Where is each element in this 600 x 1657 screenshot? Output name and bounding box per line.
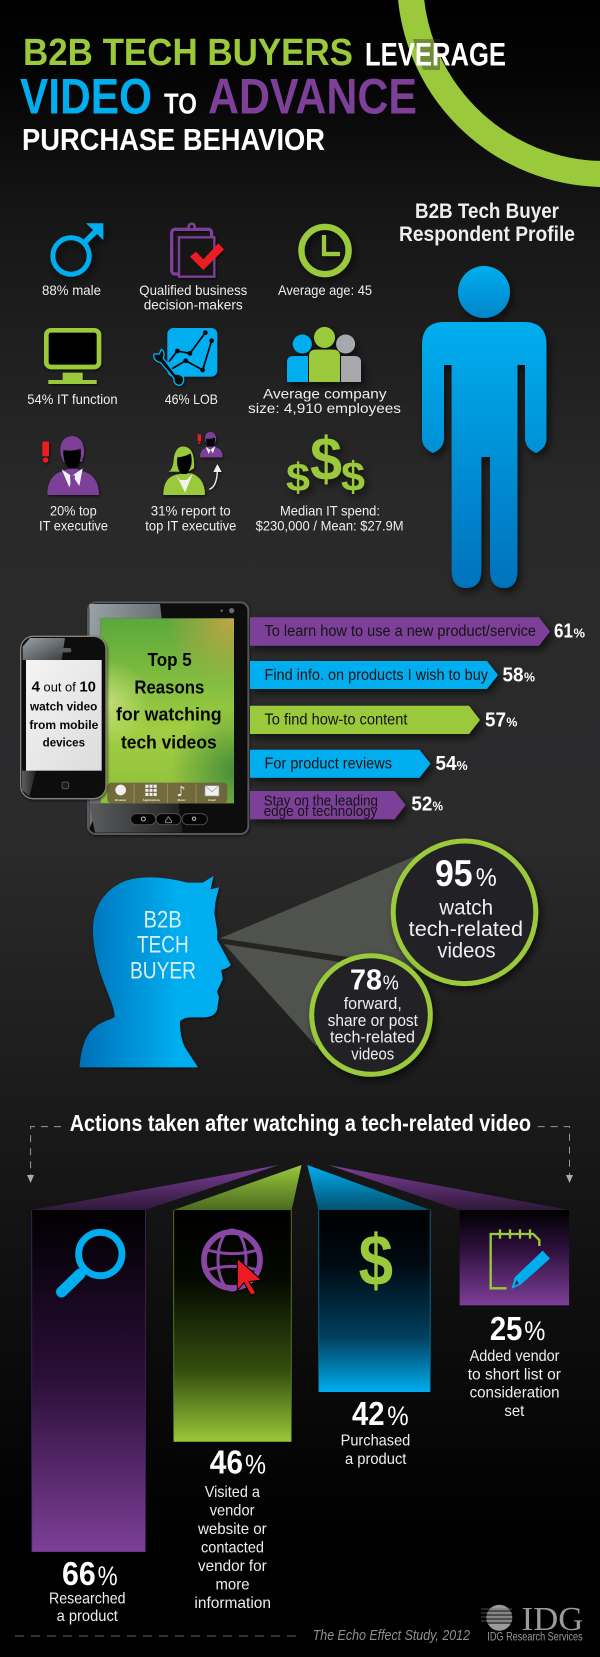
figure: buyer head silhouette: BUYER — [130, 957, 196, 984]
label: 31% report to top IT executive: 31% report to — [151, 503, 231, 519]
arrow bar: 52% leading edge: Stay on the leading — [264, 794, 378, 810]
dashed arrow left — [27, 1127, 61, 1183]
heading: actions taken: Actions taken after watching a tech-related video — [70, 1110, 531, 1136]
label: 20% top IT executive — [39, 503, 108, 534]
label: 31% report to top IT executive — [145, 503, 236, 534]
arrow bar: 58% find info: Find info. on products I wish to buy — [264, 667, 488, 684]
stat: 46% visited a vendor website: vendor — [210, 1503, 255, 1520]
arrow bar: 57% how-to content — [250, 706, 518, 734]
figure: buyer head silhouette: TECH — [137, 932, 189, 959]
label: average age: Average age: 45 — [278, 282, 372, 298]
bar: researched — [31, 1165, 279, 1552]
callout circle: 95% watch tech-related videos: tech-related — [409, 918, 523, 941]
icon: clipboard with check — [172, 222, 224, 277]
heading: respondent profile: B2B Tech Buyer — [415, 200, 559, 223]
tablet text: top 5 reasons: tech videos — [121, 731, 217, 752]
stat: 66% researched a product: % — [98, 1561, 118, 1591]
title: ADVANCE — [208, 68, 417, 124]
arrow bar: 57% how-to content: % — [506, 715, 518, 730]
stat: 66% researched a product: a product — [57, 1608, 118, 1625]
title: PURCHASE BEHAVIOR — [22, 122, 325, 157]
logo: IDG Research Services: IDG — [522, 1601, 583, 1638]
icon: dollar signs — [286, 425, 365, 500]
arrow bar: 52% leading edge: 52 — [411, 794, 432, 816]
callout circle: 95% watch tech-related videos: % — [476, 864, 497, 892]
label: 54% IT function: 54% IT function — [27, 391, 118, 407]
label: 88% male: 88% male — [42, 282, 101, 298]
stat: 46% visited a vendor website: 46 — [210, 1444, 243, 1481]
stat: 46% visited a vendor website: information — [194, 1595, 271, 1612]
dashed arrow right — [538, 1127, 573, 1183]
icon: woman reporting to executive — [163, 432, 223, 495]
label: average company size — [248, 386, 401, 416]
icon: monitor — [46, 330, 99, 384]
phone text: 4 out of 10 watch video from mobile devices: devices — [43, 736, 85, 750]
arrow bar: 57% how-to content: To find how-to content — [264, 711, 408, 728]
icon: clock — [301, 227, 349, 274]
stat: 25% added vendor to short list: set — [504, 1403, 525, 1420]
label: qualified business decision-makers: Qualified business — [139, 282, 247, 298]
icon: dollar signs: $ — [341, 453, 365, 500]
stat: 25% added vendor to short list — [468, 1310, 562, 1420]
stat: 66% researched a product: Researched — [49, 1591, 126, 1608]
device: tablet with top 5 reasons — [88, 602, 248, 834]
callout circle: 95% watch tech-related videos: 95 — [435, 853, 473, 894]
title: VIDEO — [20, 68, 152, 124]
device: tablet with top 5 reasons: Browser — [115, 798, 126, 802]
device: tablet with top 5 reasons: Music — [178, 798, 186, 802]
label: median IT spend: $230,000 / Mean: $27.9M — [256, 518, 404, 534]
phone text: 4 out of 10 watch video from mobile devices: 4 out of 10 — [32, 680, 96, 696]
icon: dollar sign: $ — [359, 1221, 393, 1301]
stat: 46% visited a vendor website: Visited a — [205, 1484, 260, 1501]
label: median IT spend — [256, 503, 404, 534]
label: average company size: size: 4,910 employees — [248, 400, 401, 416]
callout circle: 78% forward, share or post: share or post — [328, 1012, 418, 1030]
arrow bar: 54% product reviews: 54 — [436, 753, 457, 775]
icon: notepad and pencil — [491, 1229, 550, 1289]
stat: 42% purchased a product: % — [387, 1401, 409, 1431]
decorative green ring — [410, 0, 600, 174]
arrow bar: 58% find info: 58 — [502, 665, 524, 687]
tablet text: top 5 reasons: for watching — [116, 704, 222, 725]
label: 20% top IT executive: IT executive — [39, 518, 108, 534]
icon: dollar signs: $ — [310, 425, 342, 493]
label: average company size: Average company — [263, 386, 386, 402]
bars: actions taken — [31, 1165, 569, 1552]
label: median IT spend: Median IT spend: — [280, 503, 380, 519]
stat: 42% purchased a product: a product — [345, 1451, 407, 1468]
stat: 25% added vendor to short list: to short list or — [468, 1367, 562, 1384]
stat: 25% added vendor to short list: 25 — [490, 1310, 522, 1347]
callout circle: 78% forward, share or post: videos — [351, 1045, 394, 1063]
phone text: 4 out of 10 watch video from mobile devices: from mobile — [29, 718, 98, 732]
stat: 42% purchased a product — [341, 1395, 410, 1468]
label: qualified business decision-makers — [139, 282, 247, 312]
stat: 46% visited a vendor website: vendor for — [198, 1558, 267, 1575]
arrow bar: 52% leading edge: % — [432, 799, 443, 814]
bar: visited vendor website — [173, 1165, 302, 1442]
stat: 46% visited a vendor website — [194, 1444, 271, 1612]
phone text: 4 out of 10 watch video from mobile devices: watch video — [29, 700, 98, 714]
arrow bar: 52% leading edge — [250, 791, 443, 820]
arrow bar: 61% learn how to use: To learn how to use a new product/service — [264, 623, 536, 640]
title: B2B TECH BUYERS — [23, 32, 353, 74]
stat: 25% added vendor to short list: consideration — [470, 1385, 560, 1402]
figure: blue person silhouette — [422, 266, 546, 588]
device: tablet with top 5 reasons: ♪ — [177, 784, 186, 800]
callout circle: 78% forward, share or post — [312, 956, 430, 1074]
device: tablet with top 5 reasons: Applications — [143, 798, 161, 802]
arrow bar: 52% leading edge: edge of technology — [264, 804, 378, 820]
arrow bar: 61% learn how to use — [250, 617, 585, 646]
label: qualified business decision-makers: decision-makers — [144, 296, 243, 312]
device: tablet with top 5 reasons: Email — [208, 798, 216, 802]
callout circle: 78% forward, share or post: % — [383, 972, 399, 994]
stat: 42% purchased a product: 42 — [352, 1395, 385, 1432]
callout circle: 95% watch tech-related videos — [393, 841, 536, 984]
stat: 42% purchased a product: Purchased — [341, 1432, 410, 1449]
icon: dollar signs: $ — [286, 456, 310, 500]
device: phone with 4 out of 10 — [21, 636, 106, 799]
icon: top IT executive — [42, 436, 99, 495]
label: 46% LOB: 46% LOB — [165, 391, 218, 407]
stat: 25% added vendor to short list: Added vendor — [470, 1348, 560, 1365]
figure: buyer head silhouette — [80, 876, 231, 1067]
icon: group of people — [287, 327, 361, 382]
label: 31% report to top IT executive: top IT executive — [145, 518, 236, 534]
stat: 66% researched a product: 66 — [62, 1555, 96, 1592]
title — [20, 32, 506, 157]
callout circle: 78% forward, share or post: 78 — [350, 964, 382, 996]
stat: 46% visited a vendor website: % — [245, 1450, 266, 1480]
arrow bar: 54% product reviews: % — [457, 758, 468, 773]
arrow bar: 57% how-to content: 57 — [485, 710, 506, 732]
icon: magnifying glass — [62, 1232, 122, 1292]
stat: 66% researched a product — [49, 1555, 126, 1625]
arrow bar: 61% learn how to use: % — [574, 625, 585, 640]
arrow bar: 54% product reviews: For product reviews — [264, 755, 392, 772]
phone text: 4 out of 10 watch video from mobile devices — [29, 680, 98, 750]
callout circle: 95% watch tech-related videos: watch — [438, 896, 493, 919]
arrow bar: 58% find info: % — [524, 670, 535, 685]
title: LEVERAGE — [365, 36, 506, 72]
stat: 46% visited a vendor website: website or — [197, 1521, 267, 1538]
icon: male symbol — [53, 223, 103, 274]
heading: respondent profile: Respondent Profile — [399, 223, 575, 246]
arrow bar: 54% product reviews — [250, 750, 468, 778]
tablet text: top 5 reasons: Top 5 — [148, 649, 192, 670]
bar: purchased — [307, 1165, 431, 1392]
heading: respondent profile — [399, 200, 575, 246]
tablet text: top 5 reasons — [116, 649, 222, 752]
stat: 46% visited a vendor website: contacted — [201, 1540, 264, 1557]
icon: globe with cursor — [204, 1230, 261, 1295]
callout circle: 95% watch tech-related videos: videos — [437, 939, 496, 962]
beams from head to circles — [220, 852, 464, 1046]
stat: 46% visited a vendor website: more — [216, 1576, 250, 1594]
tablet text: top 5 reasons: Reasons — [134, 676, 204, 697]
logo: IDG Research Services — [481, 1601, 583, 1644]
bar: added to short list — [328, 1165, 569, 1305]
label: 20% top IT executive: 20% top — [50, 503, 97, 519]
callout circle: 78% forward, share or post: tech-related — [330, 1029, 415, 1047]
source: the echo effect study: The Echo Effect Study, 2012 — [313, 1627, 471, 1644]
footer dashed line — [15, 1635, 302, 1637]
figure: buyer head silhouette: B2B — [144, 907, 182, 934]
title: TO — [164, 88, 197, 120]
stat: 25% added vendor to short list: % — [524, 1316, 545, 1346]
callout circle: 78% forward, share or post: forward, — [344, 995, 402, 1013]
arrow bar: 61% learn how to use: 61 — [554, 620, 573, 642]
icon: chart and wrench — [154, 328, 217, 385]
arrow bar: 58% find info — [250, 661, 535, 689]
